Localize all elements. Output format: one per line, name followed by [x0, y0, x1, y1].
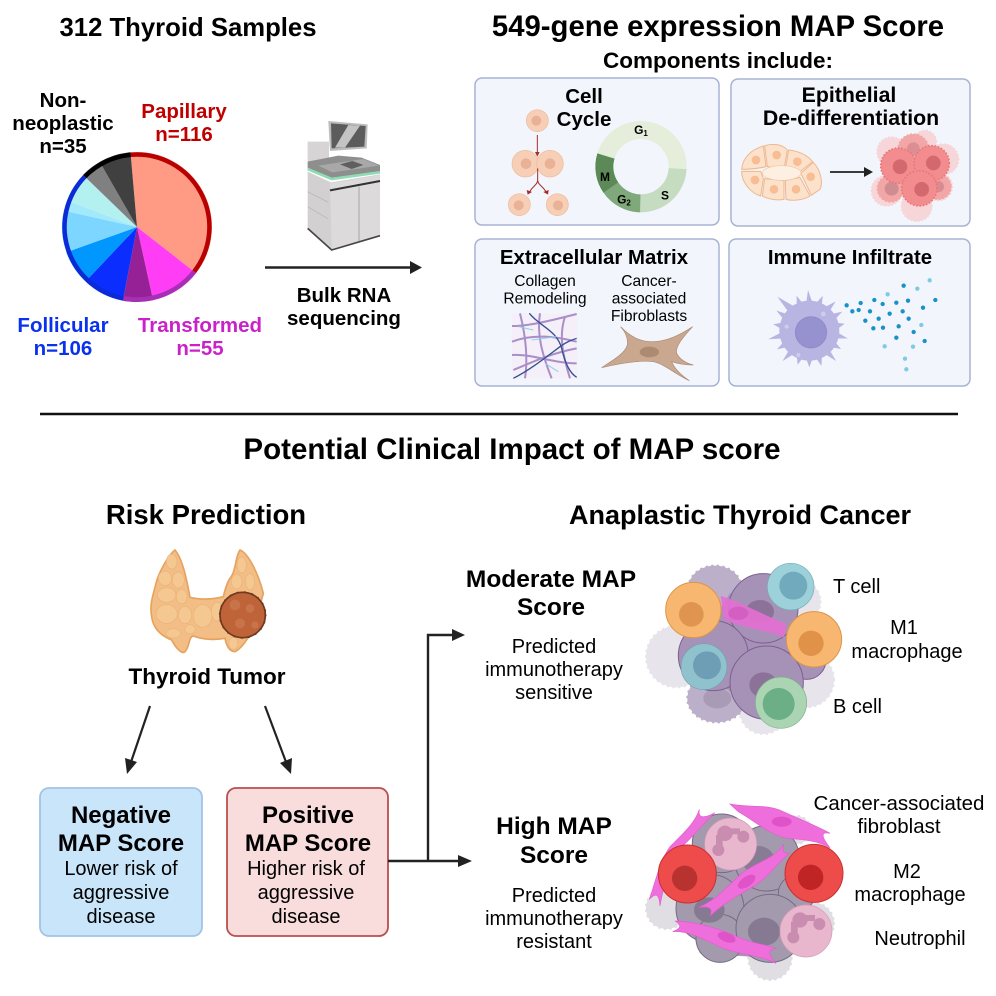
text block: moderate MAP score: Score: [517, 594, 585, 621]
label: cancer-associated fibroblast: Cancer-associated: [814, 792, 984, 815]
label: neutrophil: Neutrophil: [874, 928, 966, 950]
label: cancer-associated fibroblast: [814, 792, 984, 838]
heading: epithelial de-differentiation: De-differentiation: [763, 106, 939, 130]
label: M2 macrophage: M2: [893, 861, 921, 883]
box: negative MAP score: aggressive: [73, 882, 169, 904]
text block: high MAP score: immunotherapy: [485, 908, 623, 930]
pie label: follicular: n=106: [34, 337, 92, 360]
label: M1 macrophage: [851, 617, 963, 663]
heading: epithelial de-differentiation: [763, 83, 939, 130]
heading: clinical impact: Potential Clinical Impact of MAP score: [243, 433, 781, 466]
arrow: to bulk RNA sequencing: [265, 261, 422, 274]
icon: immune cell: [767, 290, 849, 367]
label: M1 macrophage: M1: [890, 617, 918, 639]
chart: cell cycle ring: G: [617, 192, 626, 206]
text block: moderate MAP score: [466, 566, 636, 704]
icon: RNA sequencer: [308, 121, 380, 250]
heading: anaplastic thyroid cancer: Anaplastic Thyroid Cancer: [569, 500, 912, 530]
label: collagen remodeling: [503, 273, 587, 308]
icon: de-differentiated tumor cells: [871, 130, 959, 221]
icon: epithelial cell cluster: [742, 144, 821, 200]
pie label: non-neoplastic: [12, 89, 114, 158]
heading: epithelial de-differentiation: Epithelial: [802, 83, 896, 107]
text block: moderate MAP score: sensitive: [515, 682, 593, 704]
box: negative MAP score: disease: [87, 906, 155, 928]
box: positive MAP score: aggressive: [258, 882, 354, 904]
chart: cell cycle ring: [600, 123, 678, 207]
chart: cell cycle ring: M: [600, 170, 610, 184]
subtitle: components include: Components include:: [603, 48, 833, 73]
label: collagen remodeling: Remodeling: [503, 290, 587, 308]
panel: epithelial de-differentiation: [731, 79, 970, 226]
label: thyroid tumor: Thyroid Tumor: [128, 664, 286, 689]
pie label: non-neoplastic: Non-: [40, 89, 86, 112]
pie label: transformed: [138, 314, 262, 360]
text block: high MAP score: resistant: [516, 931, 592, 953]
label: cancer-associated fibroblast: fibroblast: [857, 815, 941, 838]
text block: high MAP score: [485, 813, 623, 953]
pie label: papillary: Papillary: [141, 100, 227, 123]
illustration: high tumor microenvironment: [646, 804, 843, 980]
box: negative MAP score: [40, 788, 202, 936]
panel: cell cycle: [475, 78, 719, 225]
label: M1 macrophage: macrophage: [851, 641, 963, 663]
pie label: follicular: Follicular: [17, 314, 109, 337]
label: cancer-associated fibroblasts: Cancer-: [621, 273, 677, 290]
illustration: moderate tumor microenvironment: [646, 563, 842, 734]
text block: moderate MAP score: Moderate MAP: [466, 566, 636, 593]
label: bulk RNA sequencing: [287, 284, 401, 330]
icon: fibroblast: [602, 327, 693, 381]
label: B cell: B cell: [833, 696, 882, 718]
pie label: papillary: [141, 100, 227, 146]
label: T cell: T cell: [833, 576, 880, 598]
arrow: to negative score: [125, 706, 150, 774]
box: negative MAP score: MAP Score: [58, 830, 184, 857]
box: positive MAP score: disease: [272, 906, 340, 928]
pie label: papillary: n=116: [155, 123, 213, 146]
pie label: follicular: [17, 314, 109, 360]
label: collagen remodeling: Collagen: [514, 273, 576, 290]
label: M2 macrophage: [854, 861, 966, 906]
icon: dividing cells: [508, 110, 568, 216]
box: positive MAP score: MAP Score: [245, 830, 371, 857]
pie label: transformed: n=55: [176, 337, 224, 360]
icon: cytokine dots: [844, 278, 937, 371]
label: cancer-associated fibroblasts: associated: [612, 290, 686, 308]
text block: high MAP score: Score: [520, 842, 588, 869]
text block: moderate MAP score: Predicted: [512, 636, 596, 658]
pie chart: thyroid samples: [62, 152, 212, 302]
title: 312 Thyroid Samples: 312 Thyroid Samples: [60, 14, 316, 42]
text block: moderate MAP score: immunotherapy: [485, 659, 623, 681]
pie label: non-neoplastic: n=35: [39, 135, 87, 158]
text block: high MAP score: High MAP: [496, 813, 612, 840]
label: bulk RNA sequencing: sequencing: [287, 307, 401, 330]
heading: cell cycle: Cell: [565, 85, 603, 108]
chart: cell cycle ring: G: [634, 123, 643, 137]
panel: immune infiltrate: [729, 239, 970, 386]
chart: cell cycle ring: S: [661, 188, 669, 202]
heading: cell cycle: [557, 85, 611, 131]
box: positive MAP score: [227, 788, 388, 936]
arrow: connector to moderate and high: [388, 629, 472, 867]
label: bulk RNA sequencing: Bulk RNA: [297, 284, 391, 307]
text block: high MAP score: Predicted: [512, 885, 596, 907]
pie label: transformed: Transformed: [138, 314, 262, 337]
label: cancer-associated fibroblasts: [611, 273, 687, 325]
box: negative MAP score: Lower risk of: [64, 858, 178, 880]
chart: cell cycle ring: 1: [643, 129, 648, 138]
box: negative MAP score: Negative: [71, 802, 171, 829]
label: cancer-associated fibroblasts: Fibroblasts: [611, 308, 687, 325]
box: positive MAP score: Higher risk of: [247, 858, 365, 880]
label: M2 macrophage: macrophage: [854, 884, 966, 906]
heading: extracellular matrix: Extracellular Matrix: [500, 247, 689, 269]
pie label: non-neoplastic: neoplastic: [12, 112, 114, 135]
panel: extracellular matrix: [475, 239, 719, 386]
box: positive MAP score: Positive: [262, 802, 354, 829]
title: MAP score: 549-gene expression MAP Score: [492, 10, 944, 43]
heading: risk prediction: Risk Prediction: [106, 499, 306, 530]
chart: cell cycle ring: 2: [626, 198, 631, 207]
icon: collagen fibres: [512, 313, 577, 379]
heading: immune infiltrate: Immune Infiltrate: [768, 247, 932, 269]
heading: cell cycle: Cycle: [557, 108, 611, 131]
arrow: to positive score: [265, 706, 292, 774]
arrow: de-differentiation: [830, 167, 873, 177]
icon: thyroid with tumor: [151, 550, 266, 652]
